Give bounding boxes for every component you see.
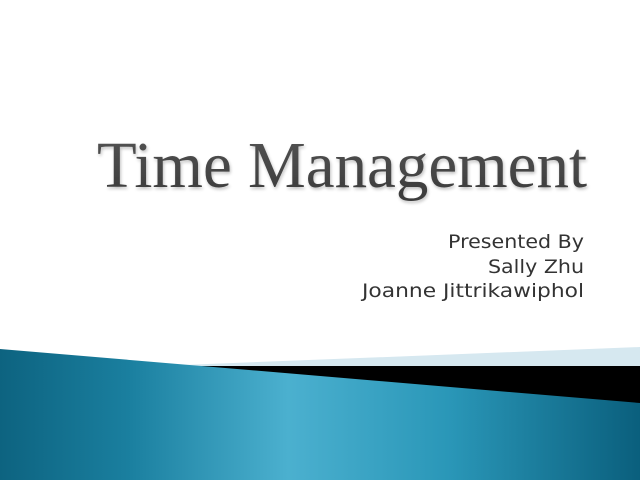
subtitle: presenters: [361, 231, 584, 302]
light blue band: [157, 347, 640, 366]
blue wave shape: [0, 349, 640, 480]
subtitle: presenters: Presented By: [448, 231, 584, 253]
subtitle: presenters: Joanne Jittrikawiphol: [361, 280, 584, 302]
black band: [163, 366, 640, 404]
subtitle: presenters: Sally Zhu: [488, 256, 584, 278]
title: Time Management: [97, 129, 587, 202]
